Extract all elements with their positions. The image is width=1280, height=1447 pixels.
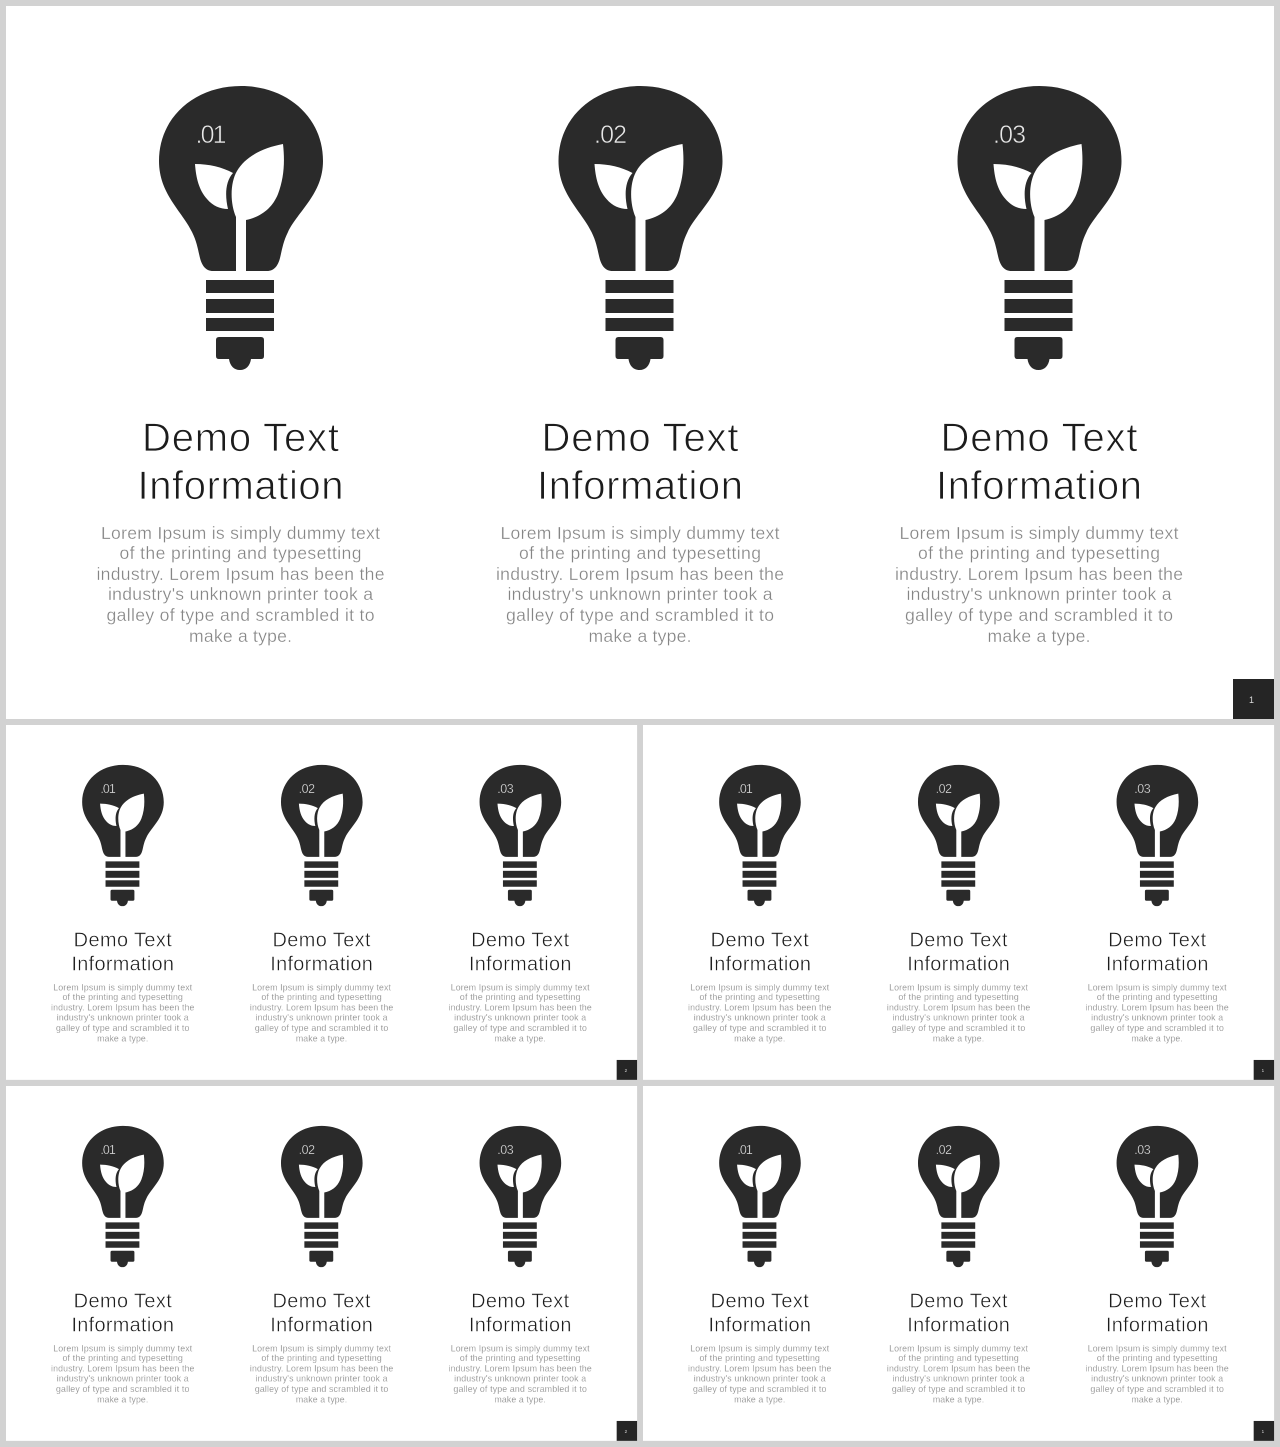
number .02: .02	[936, 1143, 952, 1157]
body text 01: of the printing and typesetting	[120, 543, 362, 563]
heading 03: Demo Text	[471, 929, 570, 951]
body text 03: Lorem Ipsum is simply dummy text	[451, 982, 590, 992]
body text 02: Lorem Ipsum is simply dummy text	[500, 523, 780, 543]
body text 02: of the printing and typesetting	[898, 1353, 1019, 1363]
body text 01: Lorem Ipsum is simply dummy text	[690, 1343, 830, 1353]
heading 01: Information	[71, 953, 174, 975]
body text 02: make a type.	[933, 1395, 984, 1405]
column 01	[688, 765, 832, 1044]
body text 03: make a type.	[1131, 1034, 1183, 1044]
number .01: .01	[100, 1143, 116, 1157]
heading 03: Information	[469, 1314, 571, 1336]
heading 02: Demo Text	[542, 416, 738, 460]
column 03	[448, 765, 592, 1044]
body text 02: of the printing and typesetting	[261, 992, 382, 1002]
body text 03: make a type.	[988, 626, 1090, 646]
page number badge	[1233, 679, 1274, 719]
column 02	[887, 1126, 1030, 1405]
panel: main slide	[6, 6, 1274, 719]
page number badge: 1	[1249, 695, 1254, 705]
column 01	[51, 1126, 195, 1405]
heading 03: Demo Text	[940, 416, 1138, 460]
body text 01: make a type.	[734, 1034, 785, 1044]
heading 01: Demo Text	[74, 929, 172, 951]
heading 02: Demo Text	[273, 1290, 371, 1312]
body text 01: make a type.	[97, 1395, 148, 1405]
body text 02: Lorem Ipsum is simply dummy text	[889, 1343, 1029, 1353]
body text 02: Lorem Ipsum is simply dummy text	[252, 1343, 392, 1353]
number .01: .01	[737, 782, 753, 796]
icon: light bulb with leaves 03	[480, 765, 561, 906]
icon: light bulb with leaves 01	[82, 1126, 164, 1267]
number .03: .03	[497, 782, 514, 796]
heading 02: Information	[537, 464, 743, 508]
heading 03: Demo Text	[471, 1290, 570, 1312]
body text 02: galley of type and scrambled it to	[892, 1384, 1025, 1394]
body text 02: industry. Lorem Ipsum has been the	[250, 1003, 393, 1013]
body text 01: industry's unknown printer took a	[694, 1013, 826, 1023]
body text 02: galley of type and scrambled it to	[255, 1384, 388, 1394]
heading 01: Information	[138, 464, 344, 508]
body text 02: of the printing and typesetting	[519, 543, 761, 563]
column 02	[496, 86, 784, 646]
body text 01: galley of type and scrambled it to	[693, 1023, 827, 1033]
body text 02: industry's unknown printer took a	[893, 1013, 1025, 1023]
column 02	[250, 765, 393, 1044]
body text 02: galley of type and scrambled it to	[255, 1023, 388, 1033]
heading 02: Information	[907, 1314, 1010, 1336]
heading 01: Demo Text	[74, 1290, 172, 1312]
body text 02: make a type.	[588, 626, 692, 646]
body text 03: Lorem Ipsum is simply dummy text	[900, 523, 1179, 543]
icon: light bulb with leaves 02	[558, 86, 722, 370]
page number badge: 1	[1262, 1068, 1265, 1073]
body text 02: galley of type and scrambled it to	[506, 605, 774, 625]
body text 03: of the printing and typesetting	[460, 1353, 580, 1363]
heading 02: Demo Text	[910, 1290, 1008, 1312]
icon: light bulb with leaves 03	[1117, 1126, 1198, 1267]
body text 02: industry's unknown printer took a	[256, 1013, 388, 1023]
body text 03: make a type.	[494, 1395, 546, 1405]
body text 02: make a type.	[933, 1034, 984, 1044]
icon: light bulb with leaves 01	[719, 1126, 801, 1267]
body text 01: Lorem Ipsum is simply dummy text	[690, 982, 830, 992]
body text 03: galley of type and scrambled it to	[453, 1384, 587, 1394]
body text 01: make a type.	[97, 1034, 148, 1044]
body text 02: Lorem Ipsum is simply dummy text	[889, 982, 1029, 992]
body text 03: industry. Lorem Ipsum has been the	[448, 1003, 592, 1013]
body text 02: industry. Lorem Ipsum has been the	[250, 1364, 393, 1374]
icon: light bulb with leaves 01	[159, 86, 323, 370]
body text 01: galley of type and scrambled it to	[56, 1023, 190, 1033]
heading 03: Information	[469, 953, 571, 975]
body text 03: industry's unknown printer took a	[454, 1374, 586, 1384]
heading 03: Information	[1106, 1314, 1208, 1336]
body text 01: industry. Lorem Ipsum has been the	[688, 1364, 832, 1374]
body text 03: industry. Lorem Ipsum has been the	[1085, 1364, 1229, 1374]
page number badge	[1254, 1060, 1274, 1080]
heading 02: Demo Text	[910, 929, 1008, 951]
number .02: .02	[299, 1143, 315, 1157]
icon: light bulb with leaves 03	[958, 86, 1122, 370]
body text 03: industry. Lorem Ipsum has been the	[1085, 1003, 1229, 1013]
number .01: .01	[737, 1143, 753, 1157]
body text 01: industry. Lorem Ipsum has been the	[688, 1003, 832, 1013]
body text 01: make a type.	[189, 626, 292, 646]
page number badge: 2	[625, 1429, 628, 1434]
heading 01: Demo Text	[711, 929, 809, 951]
body text 01: Lorem Ipsum is simply dummy text	[53, 982, 193, 992]
icon: light bulb with leaves 02	[918, 1126, 1000, 1267]
body text 01: industry. Lorem Ipsum has been the	[96, 564, 384, 584]
body text 03: make a type.	[494, 1034, 546, 1044]
body text 01: of the printing and typesetting	[699, 1353, 820, 1363]
number .03: .03	[993, 121, 1026, 149]
body text 02: make a type.	[296, 1395, 347, 1405]
page number badge	[1254, 1421, 1274, 1441]
icon: light bulb with leaves 02	[918, 765, 1000, 906]
body text 01: of the printing and typesetting	[699, 992, 820, 1002]
body text 01: make a type.	[734, 1395, 785, 1405]
heading 01: Demo Text	[711, 1290, 809, 1312]
body text 01: galley of type and scrambled it to	[106, 605, 375, 625]
body text 01: industry. Lorem Ipsum has been the	[51, 1003, 195, 1013]
body text 03: industry. Lorem Ipsum has been the	[448, 1364, 592, 1374]
body text 01: Lorem Ipsum is simply dummy text	[53, 1343, 193, 1353]
body text 01: galley of type and scrambled it to	[56, 1384, 190, 1394]
body text 02: industry. Lorem Ipsum has been the	[887, 1364, 1030, 1374]
body text 02: industry's unknown printer took a	[893, 1374, 1025, 1384]
body text 01: of the printing and typesetting	[62, 1353, 183, 1363]
body text 02: industry. Lorem Ipsum has been the	[496, 564, 784, 584]
heading 02: Information	[270, 1314, 373, 1336]
body text 03: of the printing and typesetting	[1097, 992, 1217, 1002]
number .02: .02	[594, 121, 627, 149]
heading 02: Information	[907, 953, 1010, 975]
heading 02: Demo Text	[273, 929, 371, 951]
column 01	[688, 1126, 832, 1405]
heading 01: Demo Text	[142, 416, 339, 460]
body text 03: industry's unknown printer took a	[454, 1013, 586, 1023]
icon: light bulb with leaves 03	[1117, 765, 1198, 906]
body text 03: Lorem Ipsum is simply dummy text	[1088, 1343, 1227, 1353]
panel: thumbnail bottom left	[6, 1086, 637, 1441]
body text 01: industry. Lorem Ipsum has been the	[51, 1364, 195, 1374]
page number badge	[617, 1421, 637, 1441]
heading 01: Information	[708, 1314, 811, 1336]
body text 03: galley of type and scrambled it to	[1090, 1384, 1224, 1394]
panel: thumbnail top right	[643, 725, 1274, 1080]
icon: light bulb with leaves 02	[281, 765, 363, 906]
icon: light bulb with leaves 01	[719, 765, 801, 906]
column 03	[448, 1126, 592, 1405]
column 03	[1085, 765, 1229, 1044]
body text 02: industry. Lorem Ipsum has been the	[887, 1003, 1030, 1013]
number .03: .03	[1134, 1143, 1151, 1157]
column 02	[250, 1126, 393, 1405]
body text 01: industry's unknown printer took a	[57, 1013, 189, 1023]
body text 03: galley of type and scrambled it to	[453, 1023, 587, 1033]
body text 03: industry. Lorem Ipsum has been the	[895, 564, 1183, 584]
body text 02: industry's unknown printer took a	[256, 1374, 388, 1384]
body text 02: industry's unknown printer took a	[508, 584, 773, 604]
icon: light bulb with leaves 02	[281, 1126, 363, 1267]
icon: light bulb with leaves 01	[82, 765, 164, 906]
number .03: .03	[497, 1143, 514, 1157]
body text 01: industry's unknown printer took a	[108, 584, 373, 604]
heading 03: Demo Text	[1108, 1290, 1207, 1312]
body text 03: industry's unknown printer took a	[906, 584, 1172, 604]
heading 02: Information	[270, 953, 373, 975]
number .01: .01	[100, 782, 116, 796]
body text 01: galley of type and scrambled it to	[693, 1384, 827, 1394]
body text 03: industry's unknown printer took a	[1091, 1013, 1223, 1023]
body text 02: of the printing and typesetting	[261, 1353, 382, 1363]
column 02	[887, 765, 1030, 1044]
body text 03: Lorem Ipsum is simply dummy text	[451, 1343, 590, 1353]
icon: light bulb with leaves 03	[480, 1126, 561, 1267]
body text 03: industry's unknown printer took a	[1091, 1374, 1223, 1384]
body text 03: of the printing and typesetting	[918, 543, 1160, 563]
column 03	[895, 86, 1183, 646]
heading 01: Information	[71, 1314, 174, 1336]
body text 03: galley of type and scrambled it to	[905, 605, 1173, 625]
number .02: .02	[299, 782, 315, 796]
page number badge: 2	[625, 1068, 628, 1073]
body text 03: make a type.	[1131, 1395, 1183, 1405]
panel: thumbnail bottom right	[643, 1086, 1274, 1441]
panel: thumbnail top left	[6, 725, 637, 1080]
number .01: .01	[196, 121, 226, 149]
column 03	[1085, 1126, 1229, 1405]
heading 03: Information	[936, 464, 1142, 508]
body text 02: galley of type and scrambled it to	[892, 1023, 1025, 1033]
heading 03: Information	[1106, 953, 1208, 975]
heading 01: Information	[708, 953, 811, 975]
body text 02: Lorem Ipsum is simply dummy text	[252, 982, 392, 992]
number .03: .03	[1134, 782, 1151, 796]
body text 03: galley of type and scrambled it to	[1090, 1023, 1224, 1033]
column 01	[96, 86, 384, 646]
number .02: .02	[936, 782, 952, 796]
heading 03: Demo Text	[1108, 929, 1207, 951]
body text 03: of the printing and typesetting	[1097, 1353, 1217, 1363]
body text 02: make a type.	[296, 1034, 347, 1044]
page number badge: 1	[1262, 1429, 1265, 1434]
page number badge	[617, 1060, 637, 1080]
column 01	[51, 765, 195, 1044]
body text 02: of the printing and typesetting	[898, 992, 1019, 1002]
body text 01: of the printing and typesetting	[62, 992, 183, 1002]
body text 01: industry's unknown printer took a	[694, 1374, 826, 1384]
body text 03: of the printing and typesetting	[460, 992, 580, 1002]
body text 01: Lorem Ipsum is simply dummy text	[101, 523, 380, 543]
body text 03: Lorem Ipsum is simply dummy text	[1088, 982, 1227, 992]
body text 01: industry's unknown printer took a	[57, 1374, 189, 1384]
